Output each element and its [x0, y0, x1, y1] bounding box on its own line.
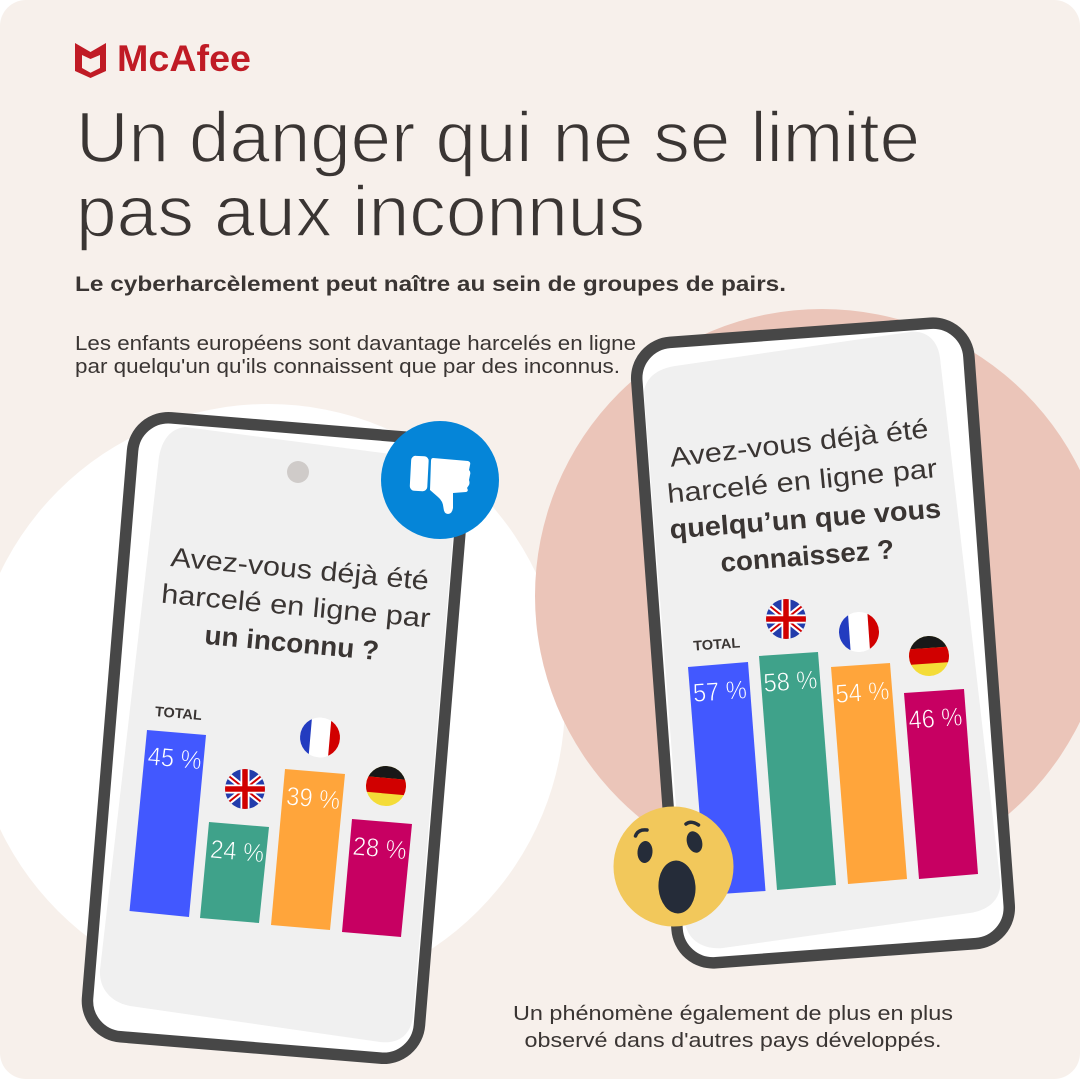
- bar: France 54%: 54 %: [834, 675, 890, 709]
- flag: Germany: [909, 636, 949, 676]
- flag: France: [839, 612, 879, 652]
- question: harcelé en ligne par: [666, 453, 938, 509]
- phone frame: [634, 321, 1012, 965]
- flag: France: [300, 718, 340, 758]
- closing text: observé dans d'autres pays développés.: [524, 1030, 942, 1052]
- flag: UK: [766, 599, 806, 639]
- question: un inconnu ?: [203, 620, 380, 666]
- question: [160, 542, 432, 666]
- bar: Germany 28%: [342, 819, 412, 937]
- intro text: Les enfants européens sont davantage harcelés en ligne: [75, 333, 636, 355]
- bar: Germany 46%: [904, 689, 978, 879]
- pink background circle: [535, 309, 1080, 883]
- title: Un danger qui ne se limite: [76, 99, 920, 178]
- question: harcelé en ligne par: [160, 579, 432, 633]
- bar: Germany 28%: 28 %: [352, 831, 408, 865]
- label: total: TOTAL: [154, 703, 203, 723]
- bar: UK 58%: 58 %: [762, 664, 818, 698]
- closing text: [513, 1003, 953, 1052]
- phone screen: [644, 332, 1000, 948]
- bar: UK 24%: 24 %: [209, 834, 265, 868]
- bar: total 45%: [130, 730, 206, 917]
- title: pas aux inconnus: [76, 173, 645, 252]
- bar: France 54%: [831, 663, 907, 884]
- phone body: [85, 415, 467, 1061]
- bar: Germany 46%: 46 %: [907, 701, 963, 735]
- flag: UK: [225, 769, 265, 809]
- phone frame: [85, 415, 467, 1061]
- bar: France 39%: [271, 769, 345, 930]
- icon: thumbs down: [381, 421, 499, 539]
- icon: surprised emoji: [614, 806, 734, 926]
- panel: phone right, acquaintances: [634, 321, 1012, 965]
- closing text: Un phénomène également de plus en plus: [513, 1003, 953, 1025]
- question: [666, 413, 942, 578]
- question: quelqu’un que vous: [669, 493, 942, 545]
- question: Avez-vous déjà été: [169, 542, 430, 596]
- bar: total 57%: 57 %: [692, 674, 748, 708]
- title: [76, 99, 920, 252]
- bar: France 39%: 39 %: [285, 781, 341, 815]
- bar chart: strangers: [130, 730, 412, 937]
- phone screen: [100, 427, 459, 1042]
- intro text: [75, 333, 636, 378]
- intro text: par quelqu'un qu'ils connaissent que par des inconnus.: [75, 356, 620, 378]
- bar: UK 24%: [200, 822, 269, 923]
- question: Avez-vous déjà été: [668, 413, 930, 473]
- white background circle: [0, 404, 565, 998]
- bar chart: acquaintances: [688, 652, 978, 895]
- question: connaissez ?: [719, 534, 895, 578]
- camera dot: [287, 461, 309, 483]
- logo: McAfee: McAfee: [117, 38, 251, 79]
- bar: total 45%: 45 %: [147, 741, 203, 775]
- panel: phone left, strangers: [85, 415, 467, 1061]
- flag: Germany: [366, 766, 406, 806]
- phone body: [634, 321, 1012, 965]
- bar: total 57%: [688, 662, 766, 895]
- bar: UK 58%: [759, 652, 836, 890]
- label: total: TOTAL: [693, 634, 741, 654]
- subtitle: Le cyberharcèlement peut naître au sein de groupes de pairs.: [75, 273, 786, 296]
